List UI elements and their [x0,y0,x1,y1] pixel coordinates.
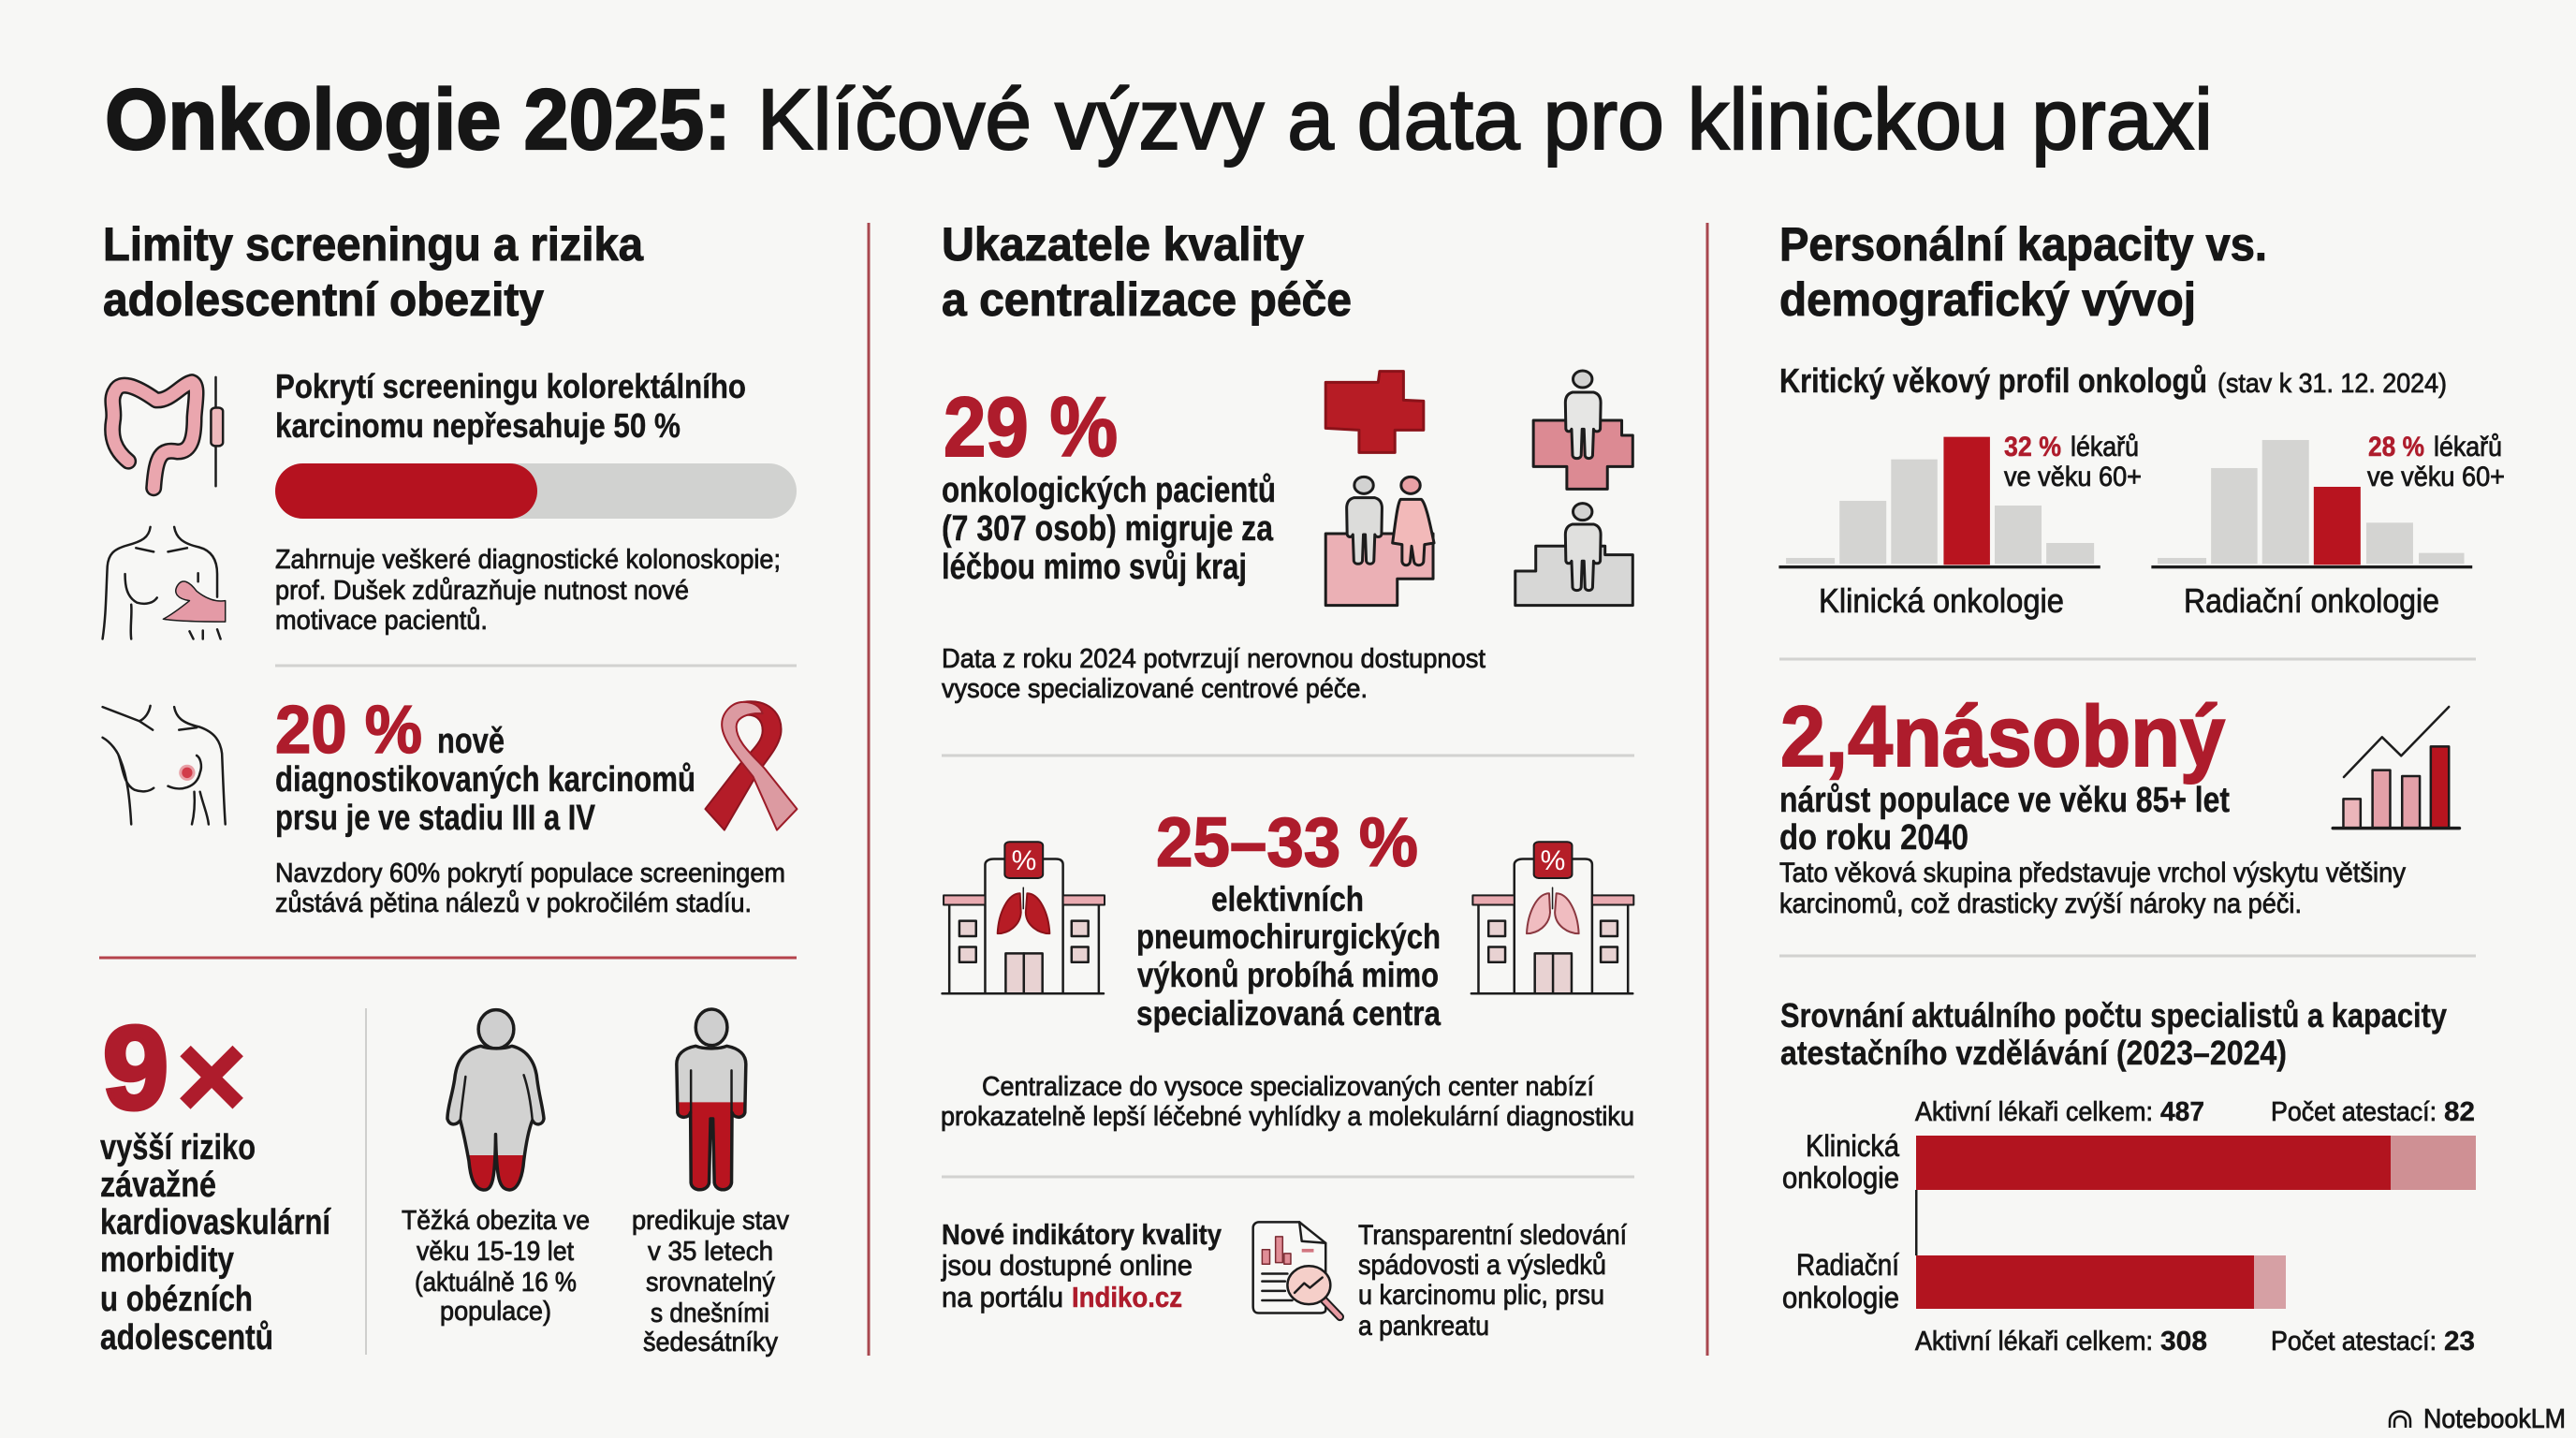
stat: 2,4násobný: nárůst populace ve věku 85+ let [1779,781,2230,820]
icon: awareness ribbon [705,701,797,830]
heading: middle column: a centralizace péče [942,273,1352,326]
stat: 25–33 %: specializovaná centra [1136,994,1441,1033]
heading: specialists vs attestations [1780,996,2447,1072]
stat: 20 %: nově [437,722,505,761]
text: higher risk: adolescentů [100,1318,273,1357]
bar chart: radiation oncology age profile: 28 % [2368,432,2424,462]
icon: hospital with red lungs [943,842,1105,993]
bar chart: radiation oncology age profile: ve věku 60+ [2367,462,2505,492]
text: screening note: Navzdory 60% pokrytí populace screeningem [275,858,785,888]
heading: colorectal screening coverage [275,367,746,445]
stat: 20 %: prsu je ve stadiu III a IV [275,799,596,838]
stat: 9×: × [176,1007,247,1144]
stat: 20 %: diagnostikovaných karcinomů [275,760,695,800]
caption: severe obesity: věku 15-19 let [417,1237,574,1267]
text: higher risk: závažné [100,1166,216,1205]
caption: predicts state in 35 years: šedesátníky [643,1328,778,1357]
text: 2024 data note: Data z roku 2024 potvrzují nerovnou dostupnost [942,644,1486,674]
stat: 20 % [275,693,695,838]
heading: colorectal screening coverage: Pokrytí screeningu kolorektálního [275,367,746,405]
panel: screening limits and adolescent obesity [99,218,797,1357]
stat: 29 %: léčbou mimo svůj kraj [942,548,1247,587]
icon: breast with lump [103,706,226,824]
bar chart: specialists and attestations: Radiační [1796,1248,1899,1282]
icon: breast self-examination [103,527,226,638]
caption: severe obesity [402,1206,590,1327]
caption: predicts state in 35 years: s dnešními [651,1299,769,1328]
icon: regional migration pictograms [1325,371,1632,606]
stat: 25–33 %: elektivních [1211,880,1364,918]
caption: severe obesity: populace) [440,1297,551,1327]
logo: NotebookLM: NotebookLM [2423,1404,2566,1434]
bar chart: specialists and attestations: Počet atestací: [2271,1327,2437,1357]
bar chart: specialists and attestations: 487 [2160,1097,2204,1127]
heading: middle column [942,218,1352,326]
caption: severe obesity: Těžká obezita ve [402,1206,590,1236]
stat: 25–33 %: 25–33 % [1156,803,1418,881]
text: transparent monitoring [1358,1220,1628,1342]
heading: right column: Personální kapacity vs. [1779,218,2267,271]
bar chart: specialists and attestations [1782,1097,2476,1357]
bar chart: radiation oncology age profile: Radiační onkologie [2184,581,2439,620]
text: colonoscopy note [275,545,781,636]
bar chart: specialists and attestations: Klinická [1806,1129,1899,1163]
panel: staffing capacity vs demographics [1778,218,2505,1357]
bar chart: specialists and attestations: Počet atestací: [2271,1097,2437,1127]
text: screening note [275,858,785,918]
stat: 29 %: 29 % [944,381,1118,475]
caption: predicts state in 35 years: srovnatelný [646,1268,775,1298]
text: new quality indicators [941,1218,1222,1313]
caption: predicts state in 35 years: predikuje stav [632,1206,789,1236]
stat: 29 %: onkologických pacientů [942,471,1276,510]
heading: right column: demografický vývoj [1779,273,2196,326]
bar chart: clinical oncology age profile: lékařů [2071,432,2139,462]
text: 2024 data note [942,644,1486,704]
icon: colon [112,377,223,488]
text: higher risk: u obézních [100,1280,253,1319]
text: centralization note: prokazatelně lepší léčebné vyhlídky a molekulární diagnostiku [941,1102,1634,1132]
text: transparent monitoring: u karcinomu plic, prsu [1358,1280,1604,1311]
stat: 29 %: (7 307 osob) migruje za [942,509,1274,549]
icon: hospital with pink lungs: % [1541,845,1565,876]
text: transparent monitoring: a pankreatu [1358,1311,1489,1342]
bar chart: specialists and attestations: Aktivní lékaři celkem: [1915,1327,2153,1357]
text: higher risk: kardiovaskulární [100,1203,331,1242]
text: higher risk: morbidity [100,1240,234,1280]
title: Onkologie 2025: [105,72,731,168]
title [105,72,2213,168]
text: screening note: zůstává pětina nálezů v pokročilém stadíu. [275,888,752,918]
heading: specialists vs attestations: Srovnání aktuálního počtu specialistů a kapacity [1780,996,2447,1034]
heading: colorectal screening coverage: karcinomu nepřesahuje 50 % [275,406,681,445]
subheading: age profile: Kritický věkový profil onkologů [1779,361,2207,400]
text: centralization note: Centralizace do vysoce specializovaných center nabízí [982,1072,1594,1102]
caption: severe obesity: (aktuálně 16 % [415,1268,577,1298]
bar chart: radiation oncology age profile [2151,432,2505,620]
stat: 2,4násobný [1779,689,2230,858]
bar chart: specialists and attestations: 308 [2160,1327,2207,1357]
text: new quality indicators: na portálu [942,1281,1063,1313]
stat: 20 %: 20 % [275,693,422,768]
text: transparent monitoring: Transparentní sledování [1358,1220,1628,1251]
bar chart: clinical oncology age profile: ve věku 60+ [2004,462,2142,492]
subheading: age profile: (stav k 31. 12. 2024) [2217,369,2447,399]
panel: quality indicators and centralization [941,218,1634,1342]
stat: 25–33 %: pneumochirurgických [1136,917,1441,956]
text: new quality indicators: Indiko.cz [1072,1281,1182,1313]
stat: 9× [103,1004,247,1144]
bar chart: specialists and attestations: 23 [2444,1327,2475,1357]
stat: 25–33 %: výkonů probíhá mimo [1137,956,1439,994]
icon: report with magnifier [1253,1222,1340,1317]
bar chart: clinical oncology age profile [1778,432,2142,620]
text: age group note [1779,858,2406,919]
text: 2024 data note: vysoce specializované centrové péče. [942,674,1368,704]
heading: right column [1779,218,2267,326]
title: Klíčové výzvy a data pro klinickou praxi [757,72,2213,168]
text: new quality indicators: Nové indikátory kvality [942,1218,1222,1251]
bar chart: specialists and attestations: Aktivní lékaři celkem: [1915,1097,2153,1127]
heading: specialists vs attestations: atestačního vzdělávání (2023–2024) [1780,1034,2287,1072]
bar chart: specialists and attestations: onkologie [1782,1161,1899,1195]
stat: 2,4násobný: 2,4násobný [1780,689,2225,785]
progress bar: 50 % [275,463,797,519]
text: higher risk: vyšší riziko [100,1128,256,1167]
heading: left column: Limity screeningu a rizika [103,218,644,271]
text: transparent monitoring: spádovosti a výsledků [1358,1250,1606,1281]
text: centralization note [941,1072,1634,1132]
text: colonoscopy note: prof. Dušek zdůrazňuje nutnost nové [275,576,689,606]
icon: obese figure [447,1010,544,1190]
stat: 9×: 9 [103,1004,168,1134]
caption: predicts state in 35 years: v 35 letech [648,1237,773,1267]
bar chart: specialists and attestations: onkologie [1782,1281,1899,1314]
text: age group note: Tato věková skupina představuje vrchol výskytu většiny [1779,858,2406,888]
bar chart: clinical oncology age profile: Klinická onkologie [1819,581,2064,620]
text: colonoscopy note: motivace pacientů. [275,606,488,636]
stat: 25–33 % [1136,803,1441,1033]
caption: predicts state in 35 years [632,1206,789,1357]
text: age group note: karcinomů, což drasticky zvýší nároky na péči. [1779,888,2302,919]
text: new quality indicators: jsou dostupné online [941,1249,1193,1282]
bar chart: radiation oncology age profile: lékařů [2434,432,2502,462]
bar chart: specialists and attestations: 82 [2444,1097,2475,1127]
heading: left column [103,218,644,326]
icon: growth chart [2333,707,2459,829]
text: higher risk [100,1128,331,1357]
stat: 29 % [942,381,1276,587]
heading: left column: adolescentní obezity [103,273,544,326]
text: colonoscopy note: Zahrnuje veškeré diagnostické kolonoskopie; [275,545,781,575]
stat: 2,4násobný: do roku 2040 [1779,818,1969,858]
icon: aged figure [677,1009,746,1190]
bar chart: clinical oncology age profile: 32 % [2004,432,2061,462]
icon: hospital with pink lungs [1471,842,1633,993]
icon: hospital with red lungs: % [1012,845,1036,876]
heading: middle column: Ukazatele kvality [942,218,1304,271]
